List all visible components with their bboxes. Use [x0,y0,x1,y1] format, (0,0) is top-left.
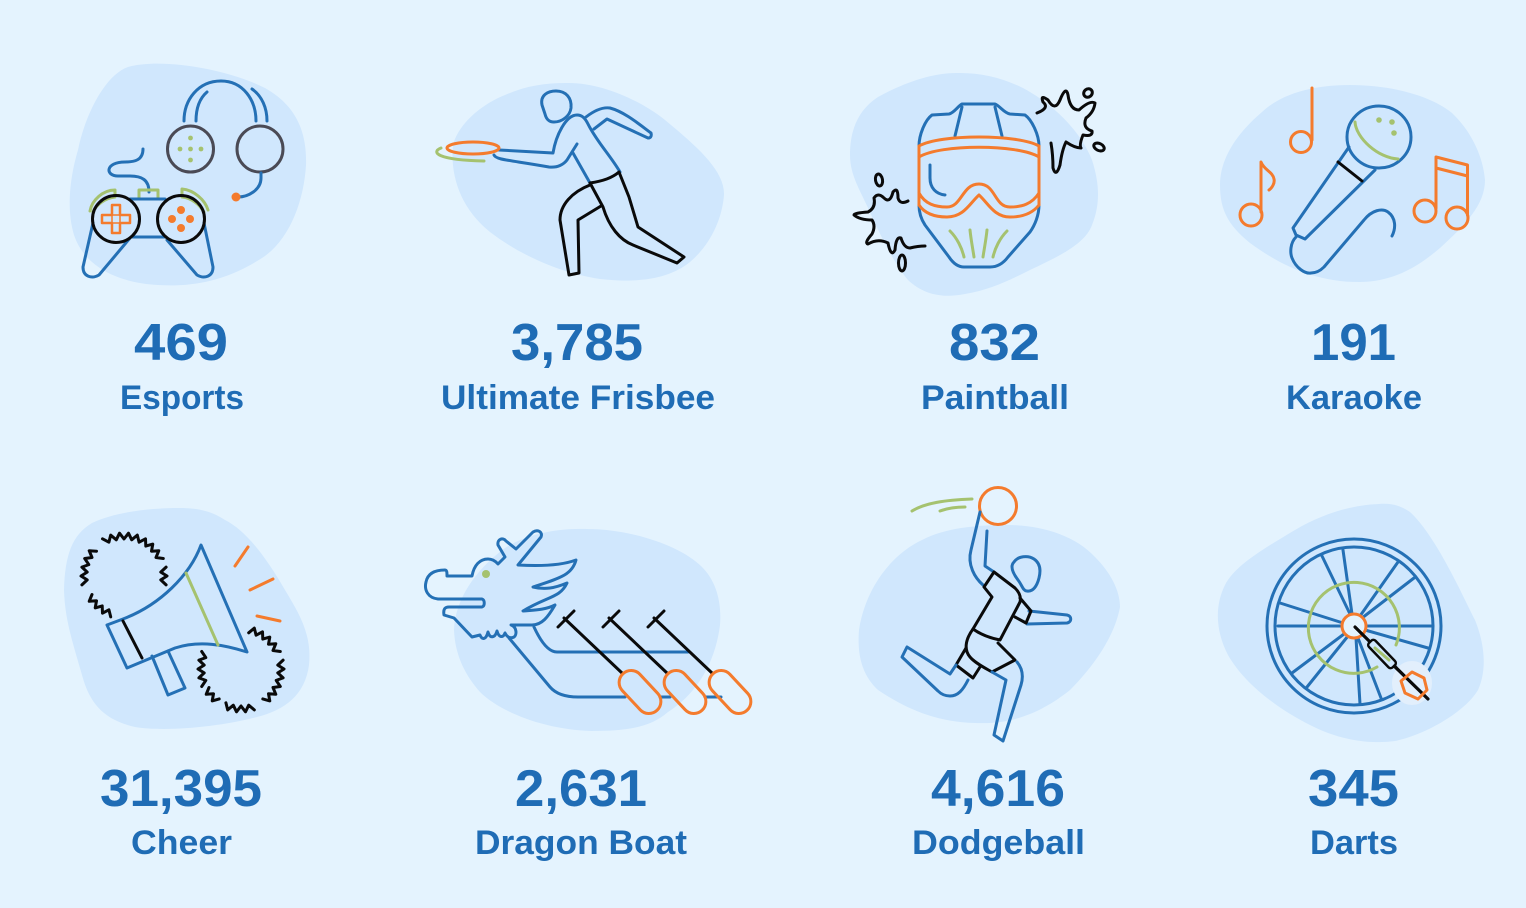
number: 31,395: 31,395 [100,760,262,818]
label: Paintball: Paintball [921,379,1069,417]
blob: cheer [64,508,309,729]
panel: Paintball [850,73,1105,417]
icon: microphone and music notes [1240,88,1468,273]
panel: Cheer [64,508,309,862]
label: Dragon Boat: Dragon Boat [475,824,687,862]
icon: frisbee thrower [437,91,684,275]
number: 4,616: 4,616 [931,760,1065,818]
blob: paintball [850,73,1098,296]
panel: Dodgeball [859,488,1120,862]
label: Esports: Esports [120,379,244,417]
number: 469: 469 [134,314,228,372]
panel: Ultimate Frisbee [437,83,724,417]
icon: dartboard and dart [1267,539,1441,713]
icon: headset and game controller [83,81,283,277]
icon: paintball mask with splats [854,87,1105,271]
label: Ultimate Frisbee: Ultimate Frisbee [441,379,715,417]
icon: dodgeball player [902,488,1071,741]
panel: Karaoke [1220,85,1485,417]
number: 191: 191 [1311,314,1396,372]
panel: Esports [70,64,306,417]
label: Karaoke: Karaoke [1286,379,1422,417]
label: Cheer: Cheer [131,824,232,862]
blob: dragon boat [454,529,720,731]
number: 345: 345 [1308,760,1399,818]
blob: karaoke [1220,85,1485,282]
label: Dodgeball: Dodgeball [912,824,1085,862]
number: 832: 832 [949,314,1040,372]
number: 3,785: 3,785 [511,314,643,372]
blob: dodgeball [859,525,1120,723]
panel: Dragon Boat [426,529,756,862]
panel: Darts [1218,504,1484,862]
blob: esports [70,64,306,285]
icon: dragon boat with paddles [426,531,756,718]
blob: darts [1218,504,1484,742]
icon: megaphone and pom-poms [81,533,284,712]
number: 2,631: 2,631 [515,760,647,818]
label: Darts: Darts [1310,824,1398,862]
blob: frisbee [452,83,724,281]
